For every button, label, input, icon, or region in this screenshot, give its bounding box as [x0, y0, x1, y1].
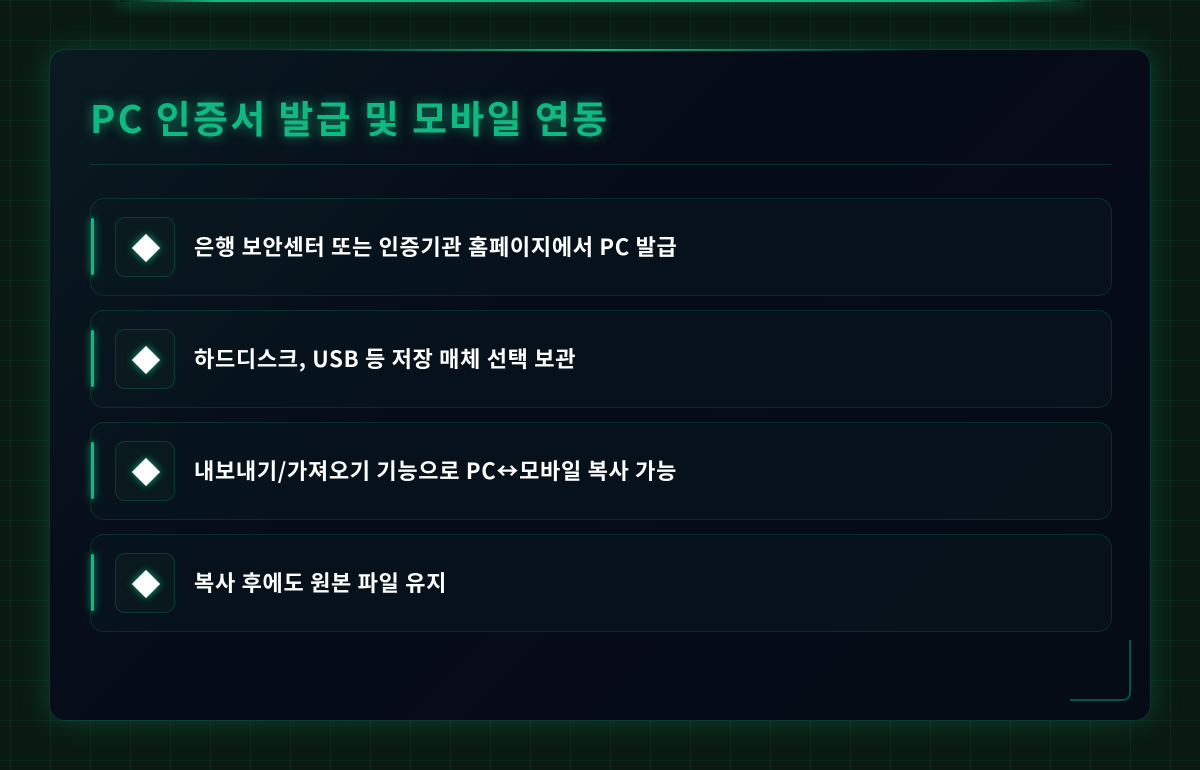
item 3 [90, 422, 1112, 520]
item 2 [90, 310, 1112, 408]
item 3: 내보내기/가져오기 기능으로 PC↔모바일 복사 가능 [194, 454, 677, 486]
item 4 [90, 534, 1112, 632]
item 2: 하드디스크, USB 등 저장 매체 선택 보관 [194, 342, 576, 374]
decorative corner [1070, 640, 1131, 701]
item 4: 복사 후에도 원본 파일 유지 [194, 566, 447, 598]
item 1 [90, 198, 1112, 296]
item 1: 은행 보안센터 또는 인증기관 홈페이지에서 PC 발급 [194, 230, 677, 262]
title: PC 인증서 발급 및 모바일 연동 [90, 89, 609, 144]
